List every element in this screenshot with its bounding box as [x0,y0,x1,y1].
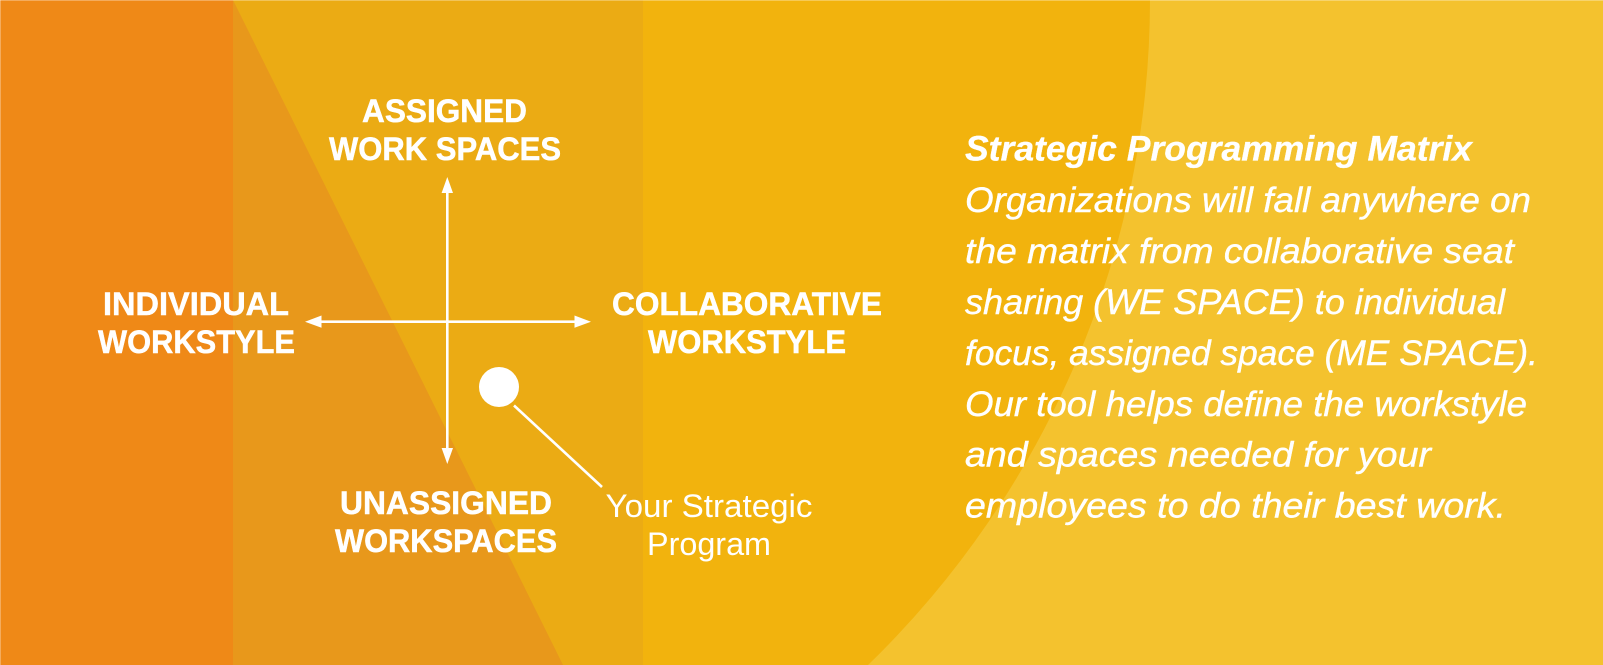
marker: strategic program dot [479,367,519,407]
label: collaborative workstyle [612,286,882,360]
leader line from dot to label [514,406,602,487]
description title: Strategic Programming Matrix [965,130,1474,168]
label: assigned work spaces: ASSIGNED [362,93,527,129]
label: unassigned workspaces [335,485,557,559]
label: assigned work spaces: WORK SPACES [329,131,561,167]
label: your strategic program [606,488,812,562]
label: assigned work spaces [329,93,561,167]
matrix axes with arrows [305,177,591,464]
description text block [965,130,1538,526]
description body: sharing (WE SPACE) to individual [965,283,1506,322]
label: unassigned workspaces: UNASSIGNED [340,485,552,521]
description body [965,181,1538,526]
description body: focus, assigned space (ME SPACE). [965,334,1538,373]
label: your strategic program: Your Strategic [606,488,812,524]
label: collaborative workstyle: WORKSTYLE [648,324,846,360]
description body: the matrix from collaborative seat [965,232,1515,271]
description body: Organizations will fall anywhere on [965,181,1531,220]
label: unassigned workspaces: WORKSPACES [335,523,557,559]
description body: and spaces needed for your [965,436,1432,474]
description body: Our tool helps define the workstyle [965,385,1527,424]
label: collaborative workstyle: COLLABORATIVE [612,286,882,322]
label: individual workstyle: WORKSTYLE [98,324,295,360]
label: your strategic program: Program [647,526,771,562]
description body: employees to do their best work. [965,486,1506,526]
label: individual workstyle [98,286,295,360]
label: individual workstyle: INDIVIDUAL [103,286,289,322]
